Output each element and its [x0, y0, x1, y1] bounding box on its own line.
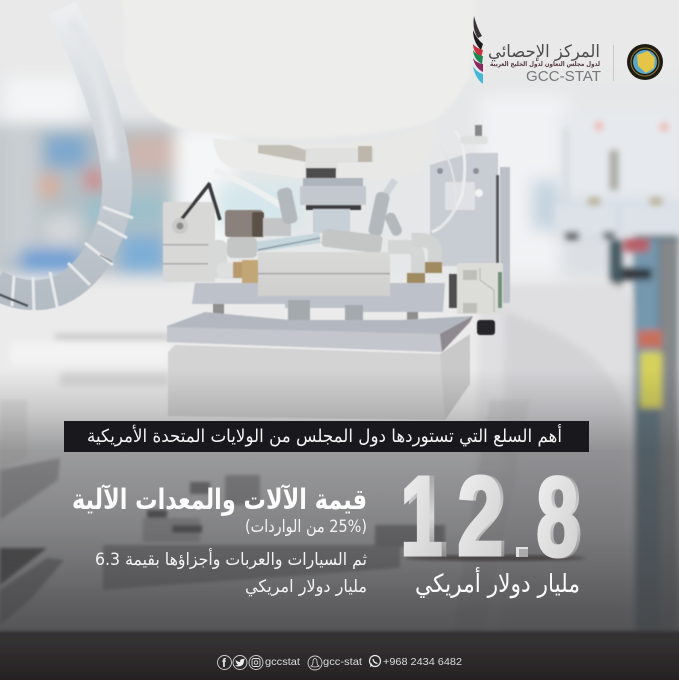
left block: [163, 183, 291, 282]
icon: instagram: [249, 656, 263, 670]
pneumatic fittings: [208, 187, 442, 285]
central block: [258, 252, 390, 296]
spiral cable: [0, 8, 133, 312]
share of imports: (25% من الواردات): [245, 517, 367, 537]
big number 12.8: [400, 454, 585, 581]
icon: facebook: f: [222, 656, 227, 670]
phone number: +968 2434 6482: [383, 656, 462, 668]
machine: robot gripper: [122, 0, 510, 420]
digit two: 2: [460, 454, 507, 580]
grey air hoses: [215, 170, 290, 212]
digit one: 1: [405, 454, 447, 580]
upper white mount: [213, 125, 436, 178]
center column: [300, 178, 366, 233]
digit two: 2: [457, 454, 504, 580]
heading: قيمة الآلات والمعدات الآلية: [72, 483, 367, 516]
white block: [168, 334, 470, 420]
upper metal plate: [192, 283, 445, 312]
handle: gccstat: gccstat: [265, 656, 300, 668]
logo Arabic name: المركز الإحصائي: [488, 42, 600, 62]
title text: أهم السلع التي تستوردها دول المجلس من الولايات المتحدة الأمريكية: [87, 424, 562, 447]
digit eight: 8: [536, 455, 579, 581]
valve box: [449, 263, 503, 314]
logo Arabic subtitle: لدول مجلس التعاون لدول الخليج العربية: [490, 60, 600, 68]
handle: gcc-stat: gcc-stat: [323, 656, 362, 668]
posts: [213, 300, 418, 331]
icon: whatsapp: [370, 656, 380, 667]
dark fade overlay: [0, 370, 679, 680]
icon: GCC emblem: [627, 44, 663, 80]
right actuator: [430, 125, 510, 335]
logo group: [473, 16, 663, 85]
footer band: [0, 631, 679, 680]
icon: twitter: [233, 656, 247, 670]
icon: ribbon: [473, 16, 483, 84]
shadow under number: [405, 555, 585, 561]
digit eight: 8: [539, 455, 582, 581]
second commodity line 1: ثم السيارات والعربات وأجزاؤها بقيمة 6.3: [95, 548, 367, 570]
lower metal plate: [167, 312, 473, 352]
logo wordmark: GCC-STAT: [526, 68, 601, 85]
digit one: 1: [400, 454, 443, 580]
second commodity line 2: مليار دولار امريكي: [245, 577, 367, 597]
unit label: مليار دولار أمريكي: [415, 566, 580, 599]
icon: facebook: [218, 656, 232, 670]
robot dome: [122, 0, 478, 138]
footer contacts: [218, 656, 462, 670]
icon: snapchat: [308, 656, 322, 670]
title bar: [64, 421, 589, 452]
decimal point: [516, 547, 528, 557]
